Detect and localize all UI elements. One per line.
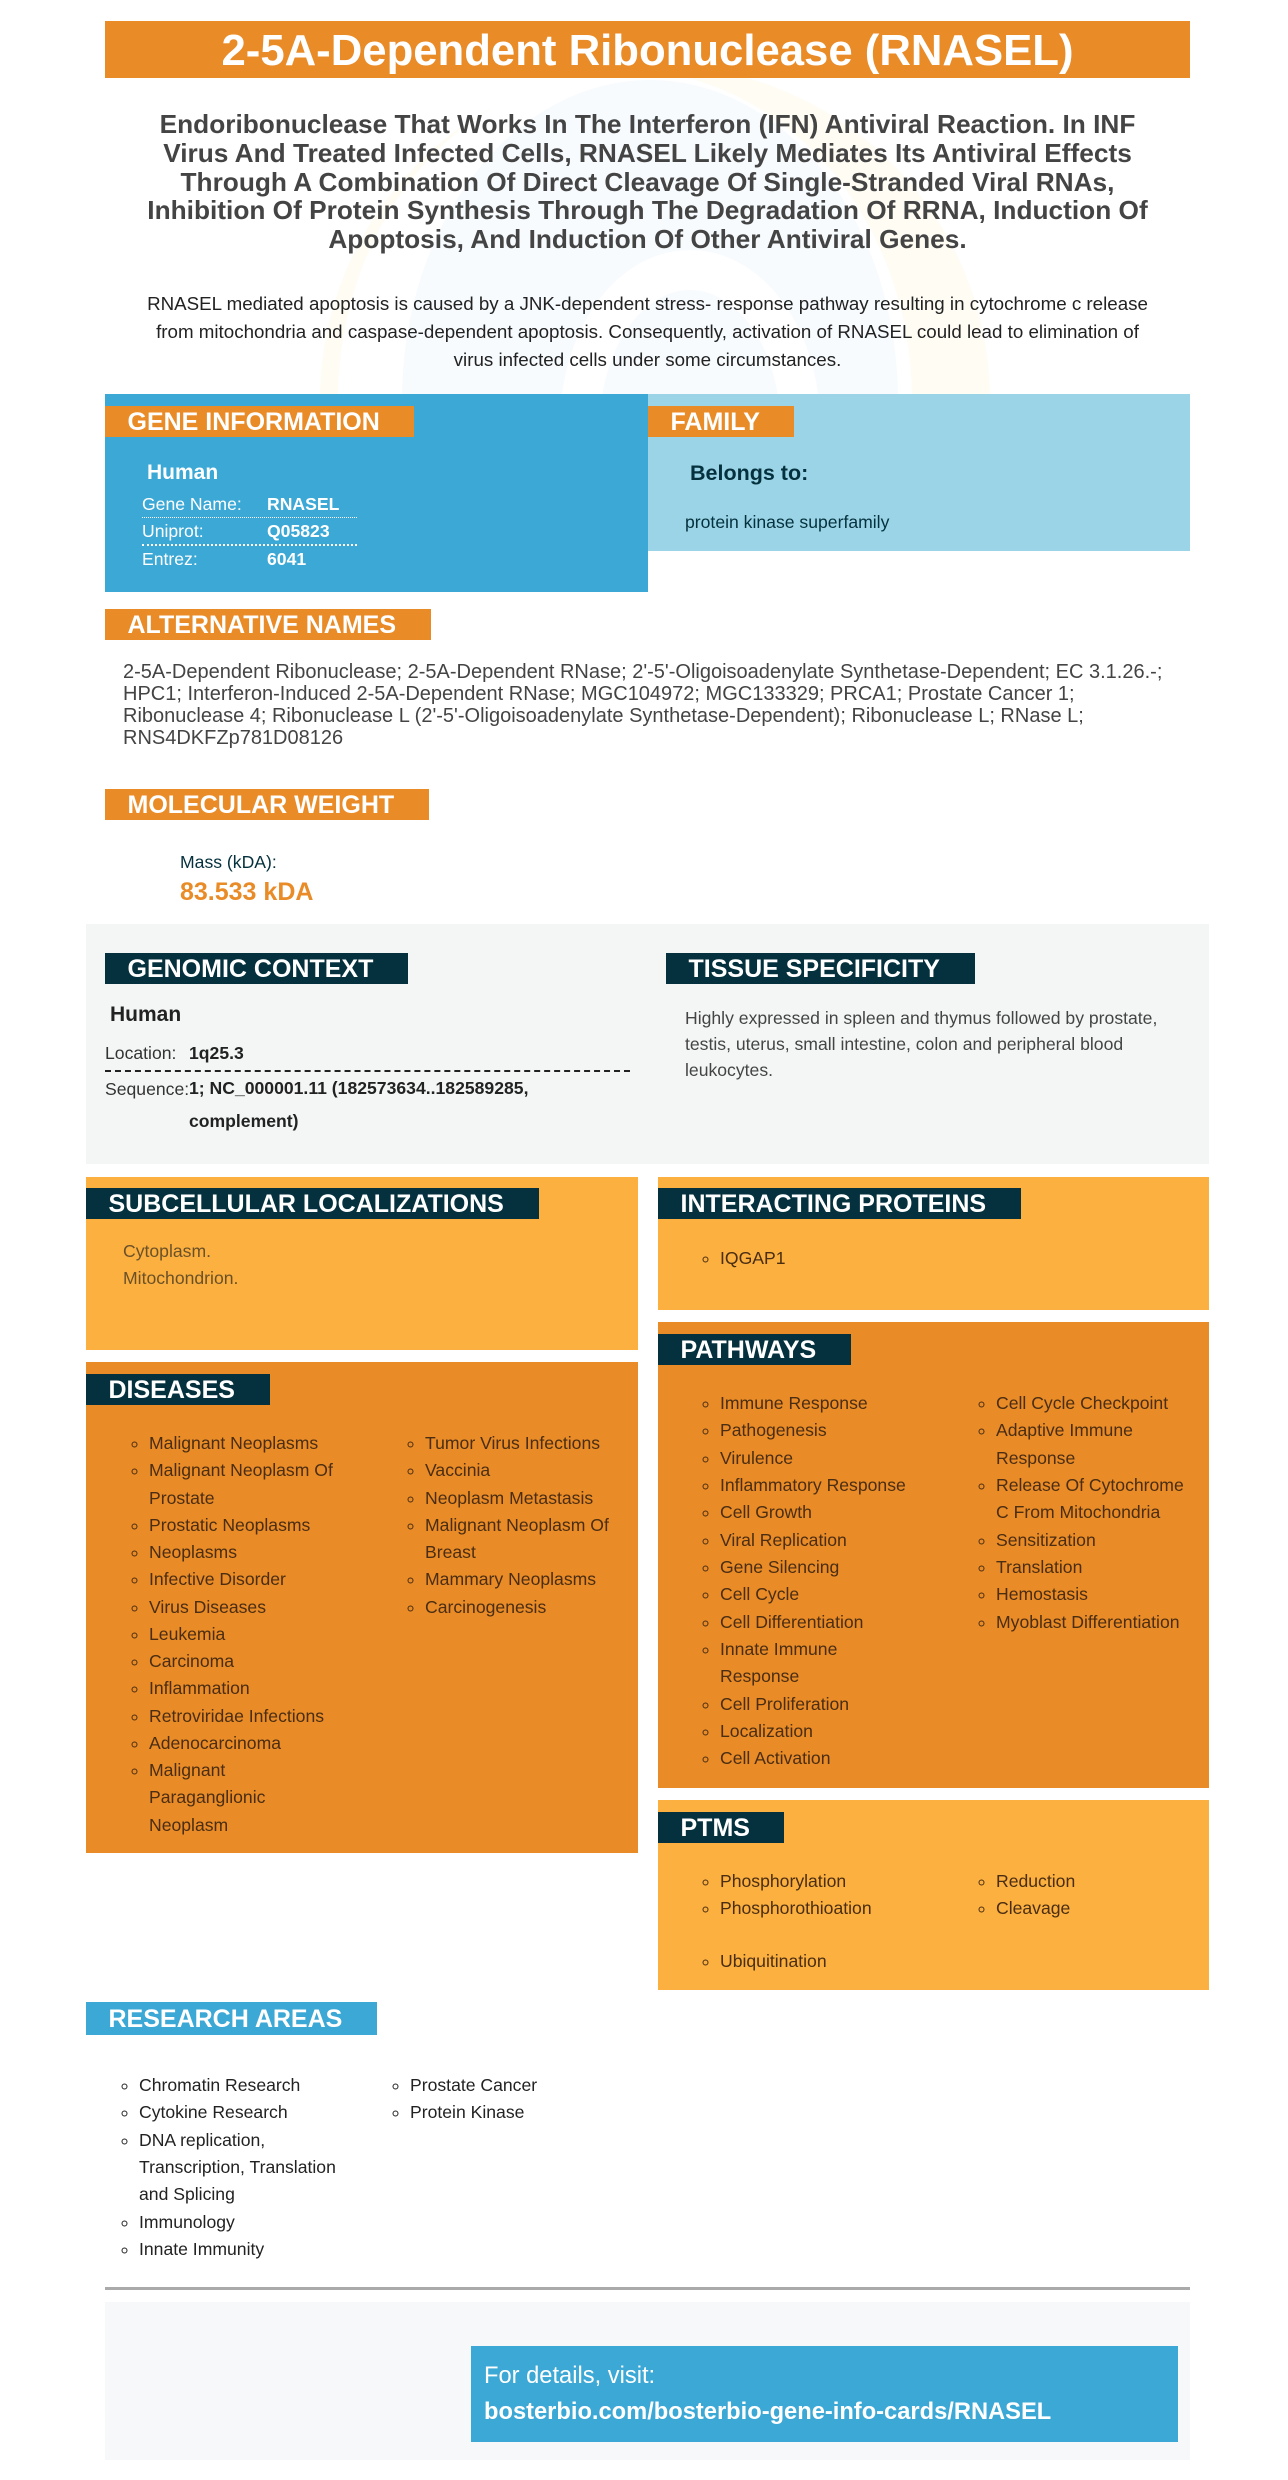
- research areas list column 1: Cytokine Research: [139, 2102, 288, 2122]
- diseases list column 1: Neoplasm: [149, 1814, 228, 1834]
- diseases list column 2: Neoplasm Metastasis: [425, 1488, 593, 1508]
- sequence: Sequence:: [105, 1079, 189, 1099]
- diseases list column 1: Prostate: [149, 1488, 215, 1508]
- pathways list column 2: Sensitization: [996, 1530, 1096, 1550]
- diseases list column 1: [132, 1433, 333, 1834]
- pathways list column 2: Myoblast Differentiation: [996, 1612, 1180, 1632]
- tissue text: testis, uterus, small intestine, colon and peripheral blood: [685, 1034, 1123, 1054]
- pathways list column 1: Gene Silencing: [720, 1557, 839, 1577]
- diseases list column 1: Leukemia: [149, 1624, 225, 1644]
- ptms list column 1: Ubiquitination: [720, 1951, 827, 1971]
- sequence: [105, 1078, 528, 1131]
- heading: subcellular localizations: SUBCELLULAR LOCALIZATIONS: [108, 1190, 504, 1218]
- subtitle: Through A Combination Of Direct Cleavage Of Single-Stranded Viral RNAs,: [181, 167, 1114, 197]
- research areas list column 1: Immunology: [139, 2212, 235, 2232]
- gene name row: [142, 494, 357, 518]
- pathways list column 1: Response: [720, 1666, 799, 1686]
- diseases list column 1: Paraganglionic: [149, 1787, 265, 1807]
- tissue text: Highly expressed in spleen and thymus followed by prostate,: [685, 1008, 1157, 1028]
- footer rule: [105, 2287, 1190, 2290]
- subtitle: Apoptosis, And Induction Of Other Antiviral Genes.: [328, 224, 967, 254]
- pathways list column 1: Viral Replication: [720, 1530, 847, 1550]
- pathways list column 1: [702, 1393, 906, 1768]
- description: virus infected cells under some circumstances.: [454, 349, 841, 370]
- alternative names text: 2-5A-Dependent Ribonuclease; 2-5A-Dependent RNase; 2'-5'-Oligoisoadenylate Synthetase-Dependent; EC 3.1.26.-;: [123, 661, 1162, 683]
- ptms list column 2: [978, 1871, 1075, 1918]
- localization text: Mitochondrion.: [123, 1268, 238, 1288]
- sequence: 1; NC_000001.11 (182573634..182589285,: [189, 1078, 528, 1098]
- pathways list column 2: Adaptive Immune: [996, 1420, 1133, 1440]
- protein list: IQGAP1: [720, 1248, 786, 1268]
- diseases list column 1: Retroviridae Infections: [149, 1706, 324, 1726]
- pathways list column 1: Immune Response: [720, 1393, 868, 1413]
- dashed separator: [105, 1070, 630, 1072]
- callout label: For details, visit:: [484, 2363, 655, 2389]
- heading: diseases: [86, 1374, 270, 1405]
- panel: ptms: [658, 1800, 1209, 1990]
- sequence: complement): [189, 1111, 298, 1131]
- diseases list column 1: Malignant: [149, 1760, 225, 1780]
- research areas list column 1: [122, 2075, 336, 2259]
- heading: ptms: PTMS: [680, 1814, 750, 1842]
- diseases list column 2: Tumor Virus Infections: [425, 1433, 600, 1453]
- panel: interacting proteins: [658, 1177, 1209, 1310]
- callout url: bosterbio.com/bosterbio-gene-info-cards/RNASEL: [484, 2399, 1051, 2425]
- subtitle: [147, 109, 1148, 254]
- belongs to: Belongs to:: [690, 461, 808, 485]
- heading: pathways: PATHWAYS: [680, 1336, 816, 1364]
- heading: research areas: RESEARCH AREAS: [108, 2005, 342, 2033]
- diseases list column 2: Malignant Neoplasm Of: [425, 1515, 609, 1535]
- description: [147, 293, 1148, 370]
- alternative names text: HPC1; Interferon-Induced 2-5A-Dependent RNase; MGC104972; MGC133329; PRCA1; Prostate Cancer 1;: [123, 683, 1075, 705]
- alternative names text: Ribonuclease 4; Ribonuclease L (2'-5'-Oligoisoadenylate Synthetase-Dependent); Ribonuclease L; RNase L;: [123, 705, 1084, 727]
- pathways list column 1: Innate Immune: [720, 1639, 837, 1659]
- pathways list column 1: Virulence: [720, 1448, 793, 1468]
- callout: details link: [471, 2346, 1178, 2442]
- ptms list column 2: Reduction: [996, 1871, 1075, 1891]
- pathways list column 1: Cell Growth: [720, 1502, 812, 1522]
- panel: footer: [105, 2302, 1190, 2460]
- diseases list column 1: Infective Disorder: [149, 1569, 286, 1589]
- diseases list column 1: Malignant Neoplasm Of: [149, 1460, 333, 1480]
- heading: research areas: [86, 2002, 377, 2035]
- research areas list column 2: [392, 2075, 537, 2122]
- panel: gene information: [105, 394, 648, 592]
- heading: family: FAMILY: [670, 408, 760, 436]
- pathways list column 1: Cell Proliferation: [720, 1694, 849, 1714]
- ptms list column 1: Phosphorothioation: [720, 1898, 872, 1918]
- pathways list column 2: Translation: [996, 1557, 1082, 1577]
- panel: genomic context and tissue specificity: [86, 924, 1209, 1164]
- diseases list column 1: Prostatic Neoplasms: [149, 1515, 310, 1535]
- gene name row: RNASEL: [267, 494, 339, 514]
- mass value: 83.533 kDA: [180, 878, 313, 906]
- heading: family: [648, 406, 794, 437]
- tissue text: [685, 1008, 1157, 1080]
- subtitle: Endoribonuclease That Works In The Interferon (IFN) Antiviral Reaction. In INF: [160, 109, 1135, 139]
- entrez row: Entrez:: [142, 549, 198, 569]
- diseases list column 1: Inflammation: [149, 1678, 250, 1698]
- ptms list column 2: Cleavage: [996, 1898, 1070, 1918]
- panel: genomic context and tissue specificity: 1q25.3: [189, 1043, 244, 1063]
- entrez row: [142, 549, 306, 569]
- research areas list column 1: Chromatin Research: [139, 2075, 300, 2095]
- research areas list column 1: and Splicing: [139, 2184, 235, 2204]
- pathways list column 1: Cell Activation: [720, 1748, 831, 1768]
- family value: protein kinase superfamily: [685, 512, 889, 532]
- panel: subcellular localizations: [86, 1177, 638, 1350]
- alternative names text: RNS4DKFZp781D08126: [123, 727, 343, 749]
- species: Human: [147, 461, 218, 484]
- heading: tissue specificity: TISSUE SPECIFICITY: [688, 955, 940, 983]
- heading: molecular weight: MOLECULAR WEIGHT: [128, 791, 394, 819]
- diseases list column 1: Carcinoma: [149, 1651, 234, 1671]
- entrez row: 6041: [267, 549, 306, 569]
- pathways list column 1: Inflammatory Response: [720, 1475, 906, 1495]
- panel: family: [648, 394, 1190, 551]
- diseases list column 2: Breast: [425, 1542, 476, 1562]
- research areas list column 2: Protein Kinase: [410, 2102, 524, 2122]
- heading: genomic context: GENOMIC CONTEXT: [128, 955, 373, 983]
- research areas list column 2: Prostate Cancer: [410, 2075, 537, 2095]
- uniprot row: Uniprot:: [142, 521, 204, 541]
- pathways list column 2: C From Mitochondria: [996, 1502, 1160, 1522]
- pathways list column 2: [978, 1393, 1184, 1632]
- uniprot row: Q05823: [267, 521, 330, 541]
- subtitle: Virus And Treated Infected Cells, RNASEL Likely Mediates Its Antiviral Effects: [163, 138, 1132, 168]
- description: RNASEL mediated apoptosis is caused by a JNK-dependent stress- response pathway resulting in cytochrome c release: [147, 293, 1148, 314]
- heading: alternative names: ALTERNATIVE NAMES: [128, 611, 396, 639]
- research areas list column 1: DNA replication,: [139, 2130, 265, 2150]
- diseases list column 2: Mammary Neoplasms: [425, 1569, 596, 1589]
- title: [105, 21, 1190, 78]
- localization text: [123, 1241, 238, 1288]
- location: [105, 1043, 244, 1063]
- diseases list column 1: Adenocarcinoma: [149, 1733, 281, 1753]
- pathways list column 2: Release Of Cytochrome: [996, 1475, 1184, 1495]
- ptms list column 1: Phosphorylation: [720, 1871, 846, 1891]
- diseases list column 2: Vaccinia: [425, 1460, 490, 1480]
- watermark logo: [320, 78, 990, 394]
- diseases list column 2: [408, 1433, 609, 1616]
- research areas list column 1: Innate Immunity: [139, 2239, 264, 2259]
- research areas list column 1: Transcription, Translation: [139, 2157, 336, 2177]
- heading: gene information: GENE INFORMATION: [128, 408, 380, 436]
- diseases list column 2: Carcinogenesis: [425, 1596, 546, 1616]
- pathways list column 1: Pathogenesis: [720, 1420, 827, 1440]
- pathways list column 2: Response: [996, 1448, 1075, 1468]
- heading: ptms: [658, 1812, 784, 1843]
- diseases list column 1: Neoplasms: [149, 1542, 237, 1562]
- heading: diseases: DISEASES: [108, 1376, 235, 1404]
- ptms list column 1: [702, 1871, 872, 1971]
- localization text: Cytoplasm.: [123, 1241, 211, 1261]
- diseases list column 1: Virus Diseases: [149, 1596, 266, 1616]
- location: Location:: [105, 1043, 176, 1063]
- uniprot row: [142, 521, 357, 546]
- subtitle: Inhibition Of Protein Synthesis Through The Degradation Of RRNA, Induction Of: [147, 195, 1148, 225]
- description: from mitochondria and caspase-dependent apoptosis. Consequently, activation of RNASEL could lead to elimination of: [156, 321, 1139, 342]
- title: 2-5A-Dependent Ribonuclease (RNASEL): [221, 26, 1074, 75]
- pathways list column 1: Cell Differentiation: [720, 1612, 863, 1632]
- panel: pathways: [658, 1322, 1209, 1788]
- tissue text: leukocytes.: [685, 1060, 773, 1080]
- heading: pathways: [658, 1334, 851, 1365]
- gene name row: Gene Name:: [142, 494, 242, 514]
- diseases list column 1: Malignant Neoplasms: [149, 1433, 318, 1453]
- pathways list column 2: Cell Cycle Checkpoint: [996, 1393, 1168, 1413]
- heading: interacting proteins: INTERACTING PROTEINS: [680, 1190, 986, 1218]
- panel: diseases: [86, 1362, 638, 1853]
- pathways list column 2: Hemostasis: [996, 1584, 1088, 1604]
- pathways list column 1: Localization: [720, 1721, 813, 1741]
- species: Human: [110, 1003, 181, 1026]
- mass label: Mass (kDA):: [180, 852, 277, 872]
- alternative names text: [123, 661, 1162, 749]
- pathways list column 1: Cell Cycle: [720, 1584, 799, 1604]
